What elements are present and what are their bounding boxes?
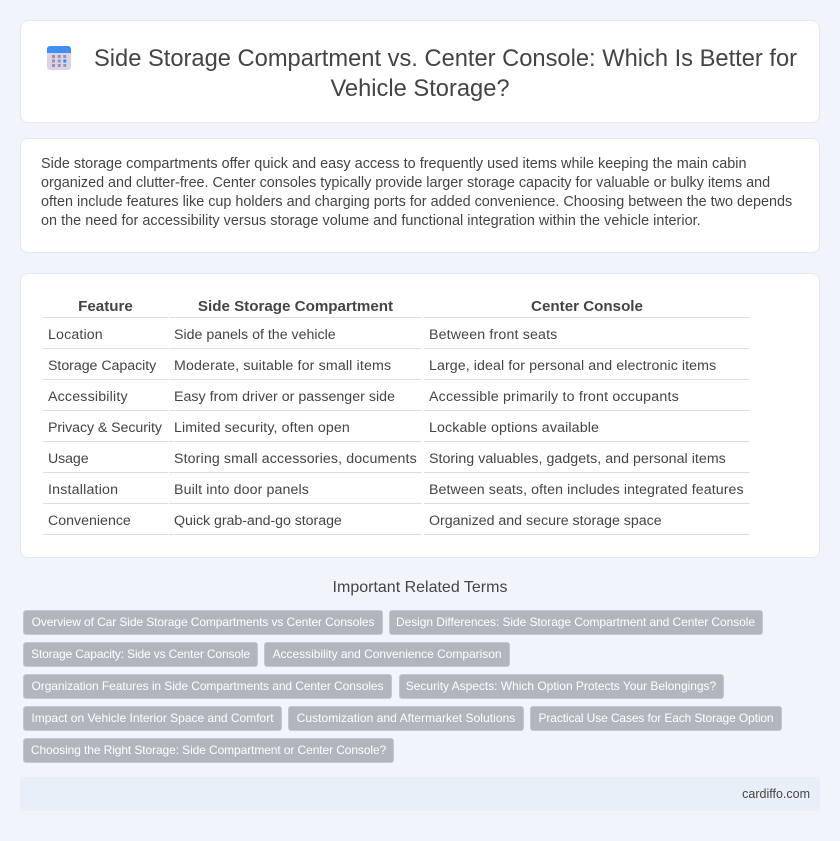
- icon: calendar grid: [47, 46, 71, 70]
- tag list: related terms: Impact on Vehicle Interior Space and Comfort: [31, 711, 274, 725]
- comparison table: Center Console: [531, 298, 643, 315]
- footer bar: [20, 777, 820, 811]
- comparison table: Accessibility: [48, 389, 128, 405]
- title: Side Storage Compartment vs. Center Console: Which Is Better for: [94, 46, 797, 72]
- comparison table: Large, ideal for personal and electronic items: [429, 358, 716, 374]
- panel: comparison table: [20, 273, 820, 558]
- text block: introduction: Side storage compartments offer quick and easy access to frequently used items while keeping the main cabin: [41, 156, 747, 172]
- heading: related terms: Important Related Terms: [333, 579, 507, 596]
- comparison table: Easy from driver or passenger side: [174, 389, 395, 405]
- panel: title card: [20, 20, 820, 123]
- text block: introduction: organized and clutter-free. Center consoles typically provide larger storage capacity for valuable or bulky items and: [41, 175, 770, 191]
- comparison table: Privacy & Security: [48, 420, 162, 436]
- tag list: related terms: Accessibility and Convenience Comparison: [273, 647, 502, 661]
- comparison table: Moderate, suitable for small items: [174, 358, 391, 374]
- comparison table: Organized and secure storage space: [429, 513, 662, 529]
- tag list: related terms: Overview of Car Side Storage Compartments vs Center Consoles: [32, 615, 374, 629]
- comparison table: Usage: [48, 451, 89, 467]
- tag list: related terms: Storage Capacity: Side vs Center Console: [31, 647, 250, 661]
- comparison table: Convenience: [48, 513, 131, 529]
- comparison table: Side panels of the vehicle: [174, 327, 336, 343]
- comparison table: Limited security, often open: [174, 420, 350, 436]
- text block: introduction: often include features like cup holders and charging ports for added convenience. Choosing between the two depends: [41, 194, 792, 210]
- comparison table: Between seats, often includes integrated features: [429, 482, 744, 498]
- comparison table: [43, 298, 750, 535]
- comparison table: Feature: [78, 298, 133, 315]
- comparison table: Location: [48, 327, 103, 343]
- tag list: related terms: Choosing the Right Storage: Side Compartment or Center Console?: [31, 743, 386, 757]
- text block: introduction: [41, 156, 792, 229]
- comparison table: Installation: [48, 482, 118, 498]
- tag list: related terms: Security Aspects: Which Option Protects Your Belongings?: [406, 679, 716, 693]
- comparison table: Built into door panels: [174, 482, 309, 498]
- comparison table: Accessible primarily to front occupants: [429, 389, 679, 405]
- comparison table: Between front seats: [429, 327, 557, 343]
- tag list: related terms: Design Differences: Side Storage Compartment and Center Console: [396, 615, 755, 629]
- comparison table: Storing small accessories, documents: [174, 451, 417, 467]
- comparison table: Storage Capacity: [48, 358, 156, 374]
- comparison table: Storing valuables, gadgets, and personal items: [429, 451, 726, 467]
- panel: introduction: [20, 138, 820, 253]
- comparison table: Quick grab-and-go storage: [174, 513, 342, 529]
- title: [94, 46, 797, 102]
- tag list: related terms: Practical Use Cases for Each Storage Option: [539, 711, 773, 725]
- tag list: related terms: Organization Features in Side Compartments and Center Consoles: [32, 679, 383, 693]
- tag list: related terms: Customization and Aftermarket Solutions: [297, 711, 515, 725]
- title: Vehicle Storage?: [330, 76, 510, 102]
- footer: site name: cardiffo.com: [742, 787, 810, 801]
- text block: introduction: on the need for accessibility versus storage volume and functional integration within the vehicle interior.: [41, 213, 701, 229]
- comparison table: Side Storage Compartment: [198, 298, 393, 315]
- comparison table: Lockable options available: [429, 420, 599, 436]
- tag list: related terms: [23, 610, 782, 763]
